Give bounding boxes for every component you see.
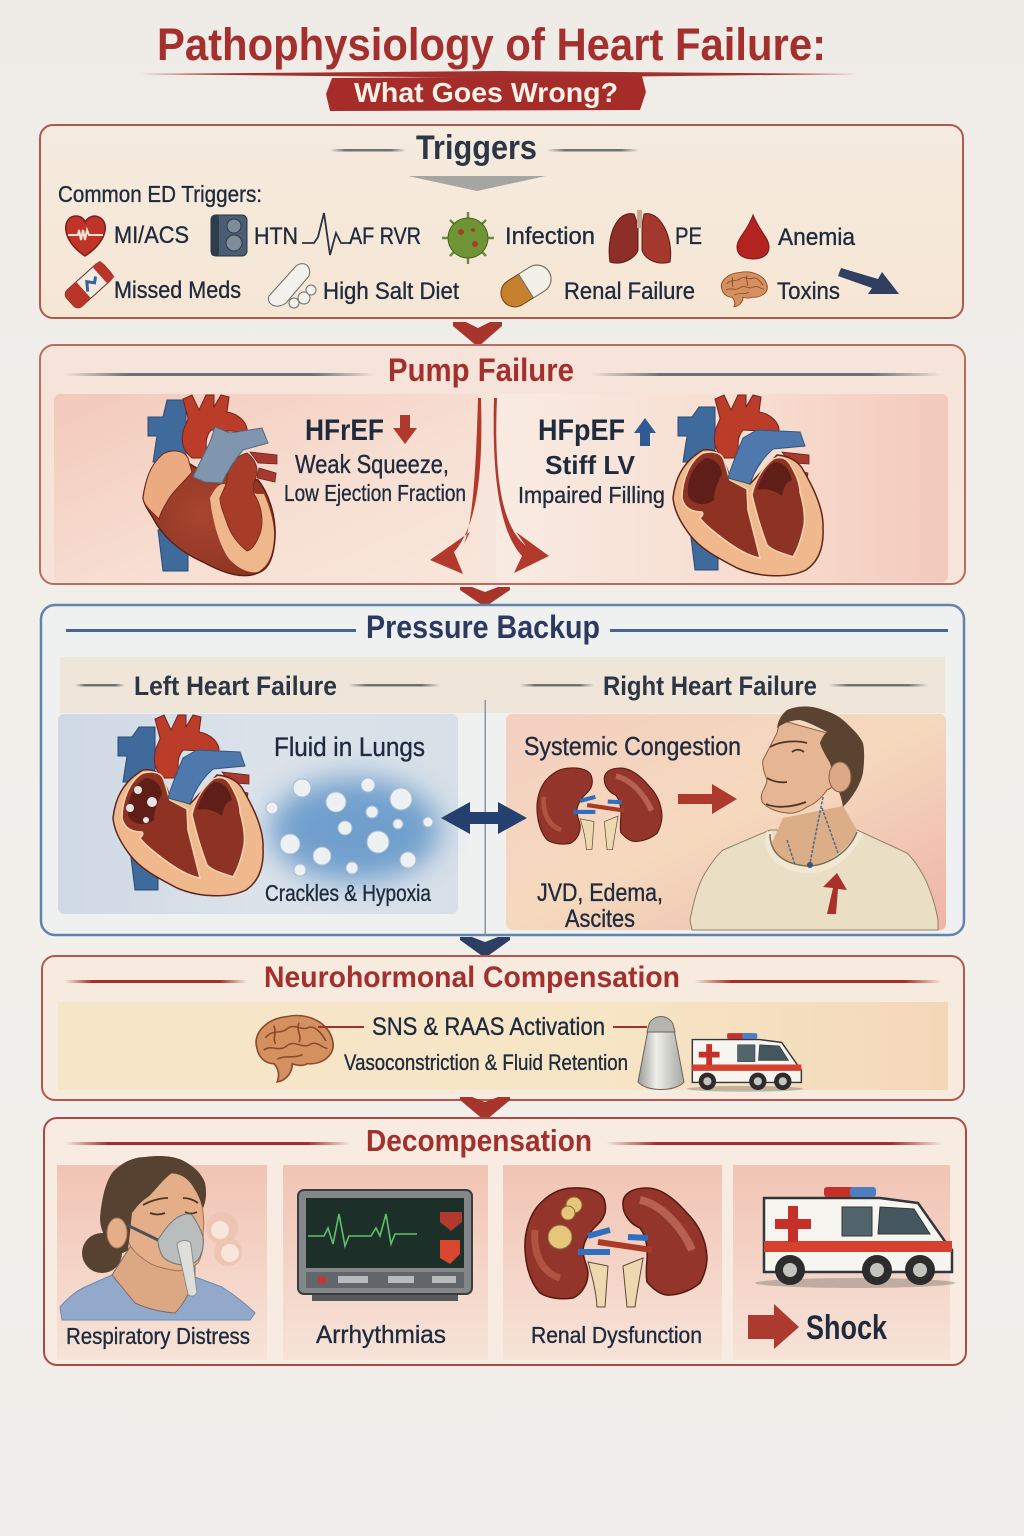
- systemic congestion label: Systemic Congestion: [524, 731, 741, 761]
- icon: heart with fluid: [113, 715, 263, 896]
- top band: [60, 657, 945, 713]
- divider: [484, 700, 486, 935]
- right heart failure heading: Right Heart Failure: [603, 671, 817, 701]
- card: renal dysfunction: [503, 1165, 722, 1360]
- icon: missed meds bottle: [63, 260, 115, 310]
- arrows: pump split: [430, 398, 549, 574]
- icon: BP device: [211, 215, 247, 256]
- PE label: PE: [675, 223, 702, 250]
- sub-panel: HFpEF: [496, 394, 948, 582]
- icon: heart HFpEF: [673, 395, 823, 576]
- arrow: kidneys to patient: [678, 784, 737, 814]
- panel: decompensation: [44, 1118, 966, 1365]
- SNS & RAAS label: SNS & RAAS Activation: [372, 1013, 605, 1041]
- sub-panel: HFpEF: Impaired Filling: [518, 482, 665, 508]
- Missed Meds label: Missed Meds: [114, 277, 241, 304]
- arrow: neurohormonal to decompensation: [460, 1097, 510, 1121]
- illustration: man with JVD: [690, 706, 938, 930]
- arrow: toxins: [838, 268, 899, 294]
- High Salt Diet label: High Salt Diet: [323, 278, 459, 305]
- fluid in lungs label: Fluid in Lungs: [274, 732, 425, 762]
- fluid bubbles: [266, 778, 433, 876]
- illustration: patient with mask: [60, 1156, 255, 1320]
- arrow: neck pressure: [823, 873, 847, 914]
- icon: heart MI/ACS: [66, 216, 105, 256]
- heading chevron: [408, 176, 546, 191]
- icon: virus: [442, 212, 494, 264]
- HFrEF label: HFrEF: [305, 414, 384, 447]
- card: arrhythmias: [283, 1165, 488, 1360]
- arrow: preserved: [634, 418, 656, 446]
- arrhythmias label: Arrhythmias: [316, 1321, 446, 1349]
- JVD label: JVD, Edema,: [537, 879, 663, 907]
- sub-panel: right failure: [506, 706, 946, 933]
- common triggers label: Common ED Triggers:: [58, 181, 262, 207]
- icon: ambulance small: [687, 1033, 803, 1092]
- panel: pressure backup: [41, 605, 964, 935]
- arrow: to shock: [748, 1304, 799, 1349]
- arrow: triggers to pump: [453, 322, 502, 347]
- vasoconstriction label: Vasoconstriction & Fluid Retention: [344, 1050, 628, 1075]
- arrow: pressure to neurohormonal: [460, 937, 510, 958]
- arrow: left-right interplay: [441, 802, 527, 834]
- subtitle ribbon: What Goes Wrong?: [354, 77, 618, 108]
- icon: heart HFrEF: [143, 395, 277, 576]
- respiratory label: Respiratory Distress: [66, 1323, 250, 1349]
- icon: ambulance: [755, 1187, 955, 1288]
- sub-panel: left failure: [58, 714, 458, 914]
- Toxins label: Toxins: [777, 278, 840, 305]
- Anemia label: Anemia: [778, 224, 856, 251]
- HTN label: MI/ACS: [114, 222, 189, 249]
- crackles label: Crackles & Hypoxia: [265, 880, 431, 906]
- icon: damaged kidneys: [525, 1188, 707, 1307]
- Infection label: Infection: [505, 223, 595, 250]
- pressure heading: Pressure Backup: [366, 609, 600, 645]
- HFpEF label: HFpEF: [538, 414, 625, 447]
- card: shock: [733, 1165, 955, 1360]
- triggers heading: Triggers: [416, 129, 537, 167]
- icon: pill capsule: [496, 260, 556, 312]
- AF RVR label: AF RVR: [349, 223, 421, 250]
- Renal Failure label: Renal Failure: [564, 278, 695, 305]
- icon: kidneys: [537, 768, 662, 850]
- arrow: pump to pressure: [460, 587, 510, 607]
- icon: lungs: [609, 210, 671, 263]
- sub-panel: HFrEF: Low Ejection Fraction: [284, 480, 466, 506]
- HFpEF description: Stiff LV: [545, 450, 636, 480]
- neuro heading: Neurohormonal Compensation: [264, 961, 680, 994]
- arrow: reduced: [393, 415, 417, 444]
- inner band: [58, 1002, 948, 1090]
- panel: pump failure: [40, 345, 965, 584]
- title: Pathophysiology of Heart Failure:: [157, 19, 826, 70]
- HTN label: HTN: [254, 223, 298, 250]
- icon: brain small: [721, 272, 767, 307]
- card: respiratory distress: [57, 1156, 267, 1360]
- HFrEF description: Weak Squeeze,: [295, 449, 449, 479]
- icon: brain: [256, 1016, 333, 1082]
- icon: monitor: [298, 1190, 472, 1301]
- renal label: Renal Dysfunction: [531, 1322, 702, 1348]
- decompensation heading: Decompensation: [366, 1123, 592, 1158]
- icon: blood drop: [737, 215, 769, 259]
- left heart failure heading: Left Heart Failure: [134, 671, 337, 701]
- icon: ECG trace: [302, 213, 350, 255]
- icon: salt pile: [268, 264, 316, 308]
- panel: triggers: [40, 125, 963, 318]
- sub-panel: HFrEF: [54, 394, 480, 582]
- title underline: [140, 71, 858, 78]
- shock label: Shock: [806, 1309, 887, 1347]
- panel: neurohormonal compensation: [42, 956, 964, 1100]
- sub-panel: right failure: Ascites: [565, 905, 635, 933]
- icon: salt shaker: [638, 1016, 684, 1090]
- pump heading: Pump Failure: [388, 352, 574, 388]
